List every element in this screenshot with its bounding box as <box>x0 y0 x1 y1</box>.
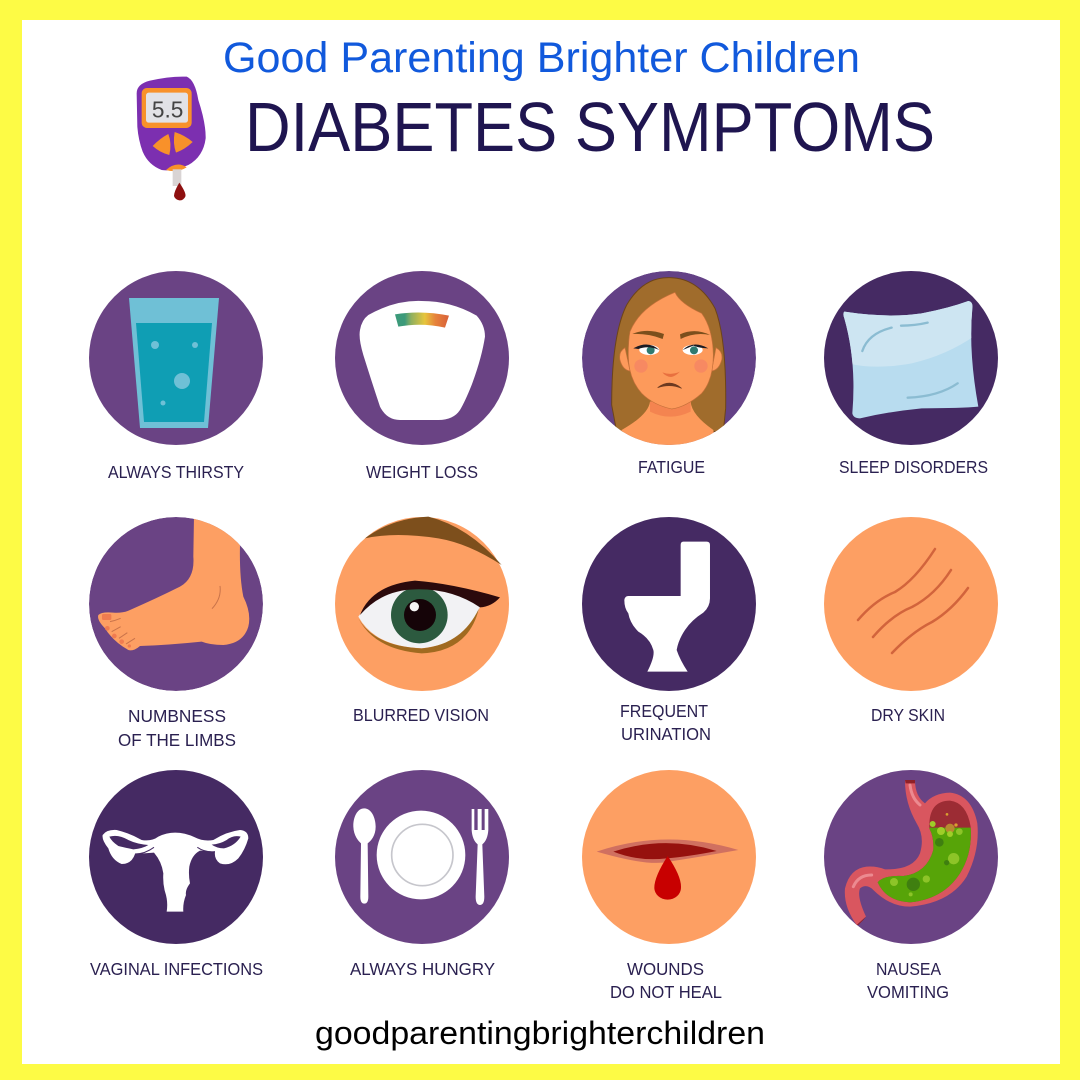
icon: eye <box>335 517 509 691</box>
label: SLEEP DISORDERS <box>839 457 988 477</box>
label: OF THE LIMBS <box>118 730 236 750</box>
icon: glucose meter <box>137 77 206 200</box>
label: DO NOT HEAL <box>610 982 722 1002</box>
panel: sleep disorders <box>824 271 998 477</box>
panel: always thirsty <box>89 271 263 482</box>
icon: glass of water <box>89 271 263 445</box>
panel: fatigue <box>582 271 756 477</box>
label <box>620 701 711 744</box>
panel: frequent urination <box>582 517 756 744</box>
main title: DIABETES SYMPTOMS <box>245 88 935 166</box>
panel: weight loss <box>335 271 509 482</box>
panel: vaginal infections <box>89 770 263 979</box>
icon: uterus <box>89 770 263 944</box>
label <box>867 959 949 1002</box>
icon: toilet <box>582 517 756 691</box>
icon: pillow <box>824 271 998 445</box>
label: DRY SKIN <box>871 705 945 725</box>
icon: glucose meter: 5.5 <box>152 96 183 122</box>
label: VAGINAL INFECTIONS <box>90 959 263 979</box>
panel: wounds do not heal <box>582 770 756 1002</box>
label: ALWAYS THIRSTY <box>108 462 244 482</box>
label: NAUSEA <box>876 959 941 979</box>
label <box>118 706 236 750</box>
panel: numbness of the limbs <box>89 517 263 750</box>
footer brand text: goodparentingbrighterchildren <box>315 1015 765 1051</box>
label: VOMITING <box>867 982 949 1002</box>
icon: bathroom scale <box>335 271 509 445</box>
label: BLURRED VISION <box>353 705 489 725</box>
icon: plate and cutlery <box>335 770 509 944</box>
icon: bleeding wound <box>582 770 756 944</box>
label: FATIGUE <box>638 457 705 477</box>
panel: blurred vision <box>335 517 509 725</box>
icon: stomach <box>824 770 998 944</box>
label: WOUNDS <box>627 959 704 979</box>
label: URINATION <box>621 724 711 744</box>
panel: nausea vomiting <box>824 770 998 1002</box>
icon: tired face <box>582 271 756 452</box>
label: ALWAYS HUNGRY <box>350 959 495 979</box>
panel: dry skin <box>824 517 998 725</box>
label: NUMBNESS <box>128 706 226 726</box>
icon: foot <box>89 517 263 691</box>
brand heading: Good Parenting Brighter Children <box>223 35 860 82</box>
label <box>610 959 722 1002</box>
panel: always hungry <box>335 770 509 979</box>
label: FREQUENT <box>620 701 708 721</box>
label: WEIGHT LOSS <box>366 462 478 482</box>
icon: skin with cracks <box>824 517 998 691</box>
